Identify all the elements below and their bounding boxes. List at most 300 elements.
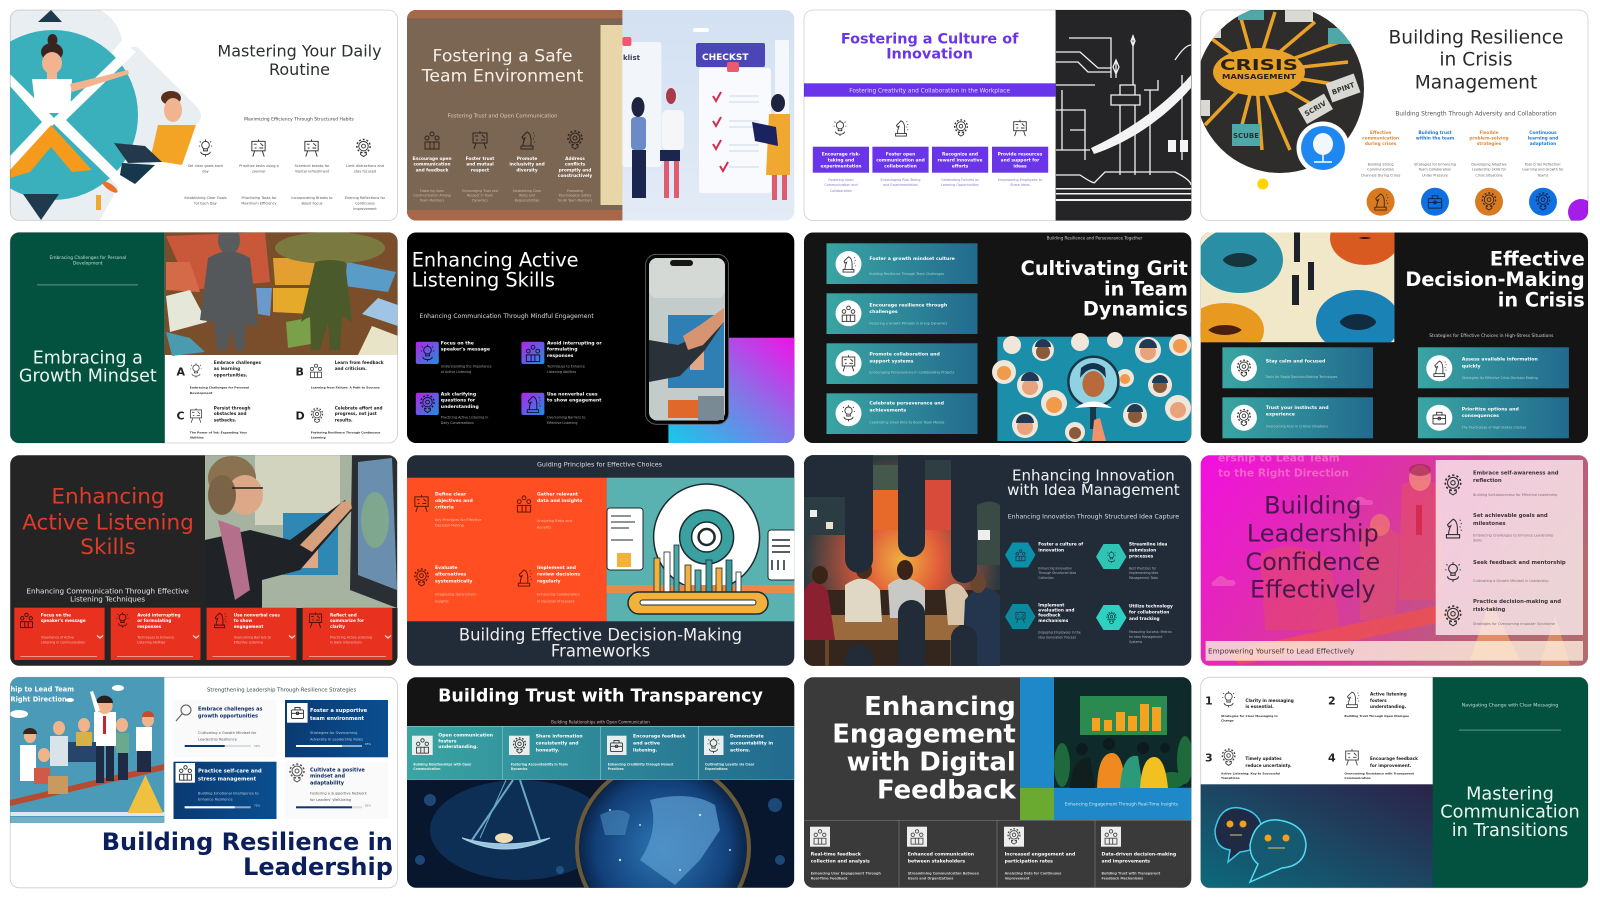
- principle headings: alternatives: [435, 572, 467, 578]
- column descriptions: Strategies for Enhancing: [1414, 162, 1456, 166]
- action descriptions: [824, 178, 1042, 192]
- band descriptions: Dynamics: [511, 767, 528, 771]
- strategy text: [214, 360, 384, 422]
- title: Building Resilience in: [102, 828, 393, 856]
- point headings: Use nonverbal cues: [547, 391, 598, 397]
- point descriptions: Overcoming Barriers to: [547, 416, 585, 420]
- point headings: and tracking: [1129, 616, 1160, 622]
- strategy descriptions: Embracing Challenges for Personal: [190, 386, 249, 390]
- column headings: [1362, 130, 1558, 147]
- action boxes: Foster open: [886, 151, 915, 157]
- title: Routine: [269, 60, 330, 79]
- illustration: team with checklist: klist: [623, 54, 641, 62]
- strategy tile: mindset: mindset and: [310, 774, 345, 780]
- point descriptions: Management Tools: [1129, 576, 1158, 580]
- subtitle band: Fostering Creativity and Collaboration in the Workplace: [849, 88, 1010, 94]
- principle headings: review decisions: [537, 572, 580, 578]
- principle labels: [412, 156, 592, 179]
- action descriptions: Celebrating Failures as: [941, 178, 979, 182]
- principle headings: objectives and: [435, 498, 473, 504]
- point descriptions: Enhancing Innovation: [1038, 566, 1072, 570]
- principle headings: criteria: [435, 505, 454, 511]
- point headings: responses: [547, 353, 574, 359]
- column headings: Effective: [1370, 130, 1391, 136]
- title: Communication: [1440, 803, 1580, 823]
- numbers: 4: [1328, 752, 1336, 765]
- photo: team meeting with rounded mask: [804, 440, 1000, 690]
- point headings: Implement: [1038, 603, 1064, 609]
- letters: [176, 366, 305, 422]
- principle labels: Address: [565, 156, 585, 162]
- habit labels: Set clear goals each: [188, 164, 223, 168]
- card descriptions: [869, 272, 955, 424]
- principle labels: Foster trust: [466, 156, 494, 162]
- numbers: 2: [1328, 694, 1336, 707]
- strategy text: Embrace challenges: [214, 360, 262, 365]
- principle labels: and mutual: [466, 162, 494, 168]
- title: Listening Skills: [412, 269, 555, 292]
- habit labels: Schedule breaks for: [295, 164, 330, 168]
- title: Enhancing Active: [412, 249, 579, 272]
- illustration: team with checklist: CHECKST: [702, 53, 749, 63]
- point headings: [1038, 542, 1173, 624]
- list panel: Embrace self-awareness and: [1473, 470, 1559, 476]
- box descriptions: Effective Listening: [234, 641, 263, 645]
- title: [422, 48, 583, 82]
- point headings: innovation: [1038, 548, 1064, 554]
- principle descriptions: in Decision Processes: [537, 599, 575, 603]
- title: Management: [1415, 72, 1537, 93]
- point descriptions: [441, 365, 585, 425]
- photo: statues on coloured cards: [165, 225, 398, 356]
- box headings: responses: [137, 624, 162, 629]
- subtitle: Enhancing Communication Through Effective: [26, 586, 189, 595]
- title: [459, 626, 742, 661]
- subtitle band: [804, 83, 1056, 97]
- band headings: and active: [633, 740, 660, 746]
- list panel: Set achievable goals and: [1473, 513, 1548, 519]
- principle descriptions: Key Principles for Effective: [435, 518, 482, 522]
- point descriptions: Implementing Idea: [1129, 571, 1158, 575]
- box headings: speaker's message: [41, 618, 86, 623]
- strategy tile: mindset: Fostering a Supportive Network: [310, 792, 368, 796]
- strategy descriptions: Development: [190, 391, 213, 395]
- strategy tile: challenges: Leadership Resilience: [198, 737, 238, 741]
- card headings: Prioritize options and: [1462, 406, 1519, 412]
- band descriptions: [413, 762, 755, 771]
- principle labels: promptly and: [559, 167, 591, 173]
- box descriptions: in Daily Interactions: [330, 641, 362, 645]
- principle labels: communication: [413, 162, 451, 168]
- column headings: strategies: [1477, 141, 1502, 147]
- card 6: Enhancing Active Listening Skills: [407, 232, 795, 443]
- strategy tile: team: Adversity in Leadership Roles: [310, 737, 363, 741]
- caption: Enhancing Engagement Through Real-Time Insights: [1065, 801, 1179, 807]
- title: Cultivating Grit: [1021, 257, 1188, 280]
- title: Enhancing: [51, 484, 165, 509]
- point headings: feedback: [1038, 613, 1061, 619]
- title: Engagement: [832, 720, 1016, 750]
- action descriptions: Collaboration: [830, 189, 852, 193]
- principle headings: regularly: [537, 578, 560, 584]
- strategy tile: self-care: 75%: [254, 804, 261, 808]
- action boxes: taking and: [828, 157, 854, 163]
- title: [832, 692, 1017, 805]
- point headings: Focus on the: [441, 340, 474, 346]
- strategy descriptions: Fostering Resilience Through Continuous: [311, 430, 381, 434]
- illustration: team climbing a slope: [10, 677, 164, 823]
- principle descriptions: [435, 518, 580, 603]
- principle labels: and feedback: [416, 167, 448, 173]
- phone with photo: [645, 254, 729, 424]
- card headings: quickly: [1462, 364, 1481, 370]
- illustration: audience watching bar chart: [1054, 677, 1193, 788]
- column headings: during crises: [1365, 141, 1397, 147]
- card headings: challenges: [869, 309, 898, 315]
- principle headings: Gather relevant: [537, 491, 579, 497]
- principle descriptions: Dynamics: [472, 199, 488, 203]
- title: [1440, 784, 1580, 841]
- point descriptions: Transitions: [1221, 776, 1240, 780]
- point headings: mechanisms: [1038, 618, 1069, 624]
- column descriptions: [811, 871, 1161, 880]
- title: Effective: [1490, 248, 1585, 271]
- point headings: fosters: [1370, 698, 1387, 703]
- action descriptions: and Experimentation: [883, 183, 918, 187]
- band headings: Open communication: [438, 733, 493, 739]
- title: [22, 484, 194, 560]
- title: [1405, 248, 1585, 312]
- habit descriptions: for Each Day: [194, 202, 217, 206]
- title: [1389, 27, 1563, 93]
- habit descriptions: Boost Focus: [302, 202, 323, 206]
- column descriptions: Feedback Mechanisms: [1102, 876, 1143, 880]
- point descriptions: Measuring Success: Metrics: [1129, 630, 1172, 634]
- title: in Transitions: [1452, 821, 1568, 841]
- band headings: fosters: [438, 738, 457, 744]
- title: Decision-Making: [1405, 268, 1585, 291]
- card 16: Mastering Communication in Transitions: [1200, 677, 1589, 888]
- band headings: honestly.: [536, 747, 560, 753]
- title: with Digital: [847, 748, 1016, 778]
- habit labels: mental refreshment: [295, 170, 330, 174]
- box headings: clarity: [330, 624, 345, 629]
- column descriptions: Building Trust with Transparent: [1102, 871, 1161, 875]
- column headings: Data-driven decision-making: [1102, 852, 1176, 858]
- band descriptions: Building Relationships with Open: [413, 762, 471, 766]
- principle labels: Promote: [517, 156, 537, 162]
- strategy text: as learning: [214, 366, 240, 371]
- strategy tile: challenges: Embrace challenges as: [198, 707, 262, 713]
- box descriptions: Listening in Communication: [41, 641, 85, 645]
- point headings: to show engagement: [547, 398, 602, 404]
- column headings: Continuous: [1529, 130, 1557, 136]
- point descriptions: of Active Listening: [441, 370, 471, 374]
- strategy tile: challenges: growth opportunities: [198, 714, 258, 720]
- photo: crisis management wheel: CRISIS: [1220, 56, 1298, 74]
- box headings: Focus on the: [41, 612, 71, 617]
- column headings: between stakeholders: [908, 859, 965, 865]
- photo: crisis management wheel: MANSAGEMENT: [1222, 73, 1296, 81]
- principle descriptions: Enhancing Collaboration: [537, 592, 580, 596]
- title: Growth Mindset: [19, 367, 157, 387]
- habit descriptions: Incorporating Breaks to: [291, 196, 333, 200]
- principle descriptions: Responsibilities: [515, 199, 540, 203]
- hexagon icons: [1005, 542, 1126, 630]
- numbers: 1: [1205, 694, 1213, 707]
- tagline bar: [1206, 641, 1583, 661]
- top text: [50, 256, 126, 266]
- title: in Team: [1104, 278, 1188, 301]
- point descriptions: for Idea Management: [1129, 635, 1163, 639]
- list panel: Practice decision-making and: [1473, 599, 1561, 605]
- icon row: [199, 139, 370, 157]
- principle headings: Implement and: [537, 565, 576, 571]
- point headings: [441, 340, 602, 410]
- point descriptions: Active Listening: Key to Successful: [1221, 772, 1280, 776]
- point descriptions: Communication: [1344, 776, 1371, 780]
- column descriptions: Communication: [1367, 168, 1394, 172]
- illustration: target and bar chart: [607, 478, 796, 621]
- habit descriptions: Prioritizing Tasks for: [241, 196, 277, 200]
- band headings: understanding.: [438, 744, 478, 750]
- title: [102, 828, 393, 881]
- point descriptions: Idea Generation Process: [1038, 635, 1076, 639]
- column descriptions: Users and Organizations: [908, 876, 953, 880]
- icon row: [425, 131, 582, 149]
- strategy descriptions: [190, 386, 381, 439]
- band headings: accountability in: [730, 740, 773, 746]
- band descriptions: Communication: [413, 767, 440, 771]
- box descriptions: Listening Abilities: [137, 641, 166, 645]
- strategy text: Persist through: [214, 405, 251, 410]
- point descriptions: Daily Conversations: [441, 421, 474, 425]
- point headings: reduce uncertainty.: [1245, 763, 1292, 768]
- card headings: Encourage resilience through: [869, 302, 947, 308]
- title: [20, 350, 156, 382]
- band headings: listening.: [633, 747, 658, 753]
- action descriptions: Empowering Employees to: [998, 178, 1042, 182]
- column descriptions: Developing Adaptive: [1471, 162, 1507, 166]
- icon tiles: [416, 342, 544, 415]
- chevrons and rules: [20, 636, 391, 656]
- column descriptions: Under Pressure: [1422, 174, 1448, 178]
- principle descriptions: for All Team Members: [558, 199, 593, 203]
- title: [1021, 257, 1188, 321]
- card headings: experience: [1266, 412, 1295, 418]
- column descriptions: Building Strong: [1368, 162, 1394, 166]
- list panel: reflection: [1473, 478, 1502, 484]
- principle descriptions: Insights: [435, 599, 449, 603]
- strategy tile: mindset: [285, 762, 388, 819]
- band descriptions: Expectations: [705, 767, 728, 771]
- strategy tile: team: 65%: [365, 742, 372, 746]
- column headings: Flexible: [1479, 130, 1499, 136]
- column descriptions: Crisis Situations: [1475, 174, 1503, 178]
- title: Embracing a: [33, 348, 143, 368]
- action boxes: Provide resources: [998, 151, 1043, 157]
- card 14: Building Trust with Transparency: [407, 677, 795, 900]
- icons: [415, 495, 532, 586]
- card 13: Building Resilience in Leadership: [10, 677, 398, 888]
- point descriptions: Practicing Active Listening in: [441, 416, 488, 420]
- top text: Development: [73, 260, 103, 266]
- principle descriptions: [413, 189, 593, 203]
- card descriptions: Fostering a Growth Mindset in Group Dynamics: [869, 321, 947, 325]
- ghost text: [1218, 452, 1349, 480]
- strategy tile: self-care: Enhance Resilience: [198, 798, 234, 802]
- icon: globe badge: [1296, 122, 1348, 170]
- habit descriptions: Maximum Efficiency: [241, 202, 277, 206]
- card headings: Celebrate perseverance and: [869, 401, 944, 407]
- point descriptions: Through Structured Idea: [1037, 571, 1076, 575]
- list panel: milestones: [1473, 521, 1506, 527]
- strategy tile: mindset: 85%: [365, 804, 372, 808]
- subtitle: Fostering Trust and Open Communication: [448, 113, 558, 119]
- subtitle: Enhancing Communication Through Mindful Engagement: [419, 313, 594, 320]
- letters: B: [296, 366, 304, 379]
- strategy text: progress, not just: [335, 411, 377, 416]
- point descriptions: Change: [1221, 719, 1234, 723]
- card 15: Enhancing Engagement with Digital Feedback: [804, 677, 1193, 888]
- icons: [190, 363, 323, 423]
- card 8: Effective Decision-Making in Crisis: [1197, 224, 1590, 444]
- box descriptions: Practicing Active Listening: [330, 635, 372, 639]
- card descriptions: The Psychology of High-Stakes Choices: [1461, 425, 1527, 429]
- icon badges: [1231, 355, 1452, 431]
- action boxes: [813, 147, 1048, 173]
- point descriptions: Understanding the Importance: [441, 365, 492, 369]
- column descriptions: Post-Crisis Reflection:: [1525, 162, 1561, 166]
- point descriptions: Listening Abilities: [547, 370, 576, 374]
- strategy tile: mindset: adaptability: [310, 781, 345, 787]
- habit descriptions: [184, 196, 386, 211]
- point headings: Encourage feedback: [1370, 756, 1418, 761]
- card descriptions: Building Resilience Through Team Challenges: [869, 272, 944, 276]
- box headings: summarize for: [330, 618, 365, 623]
- title: Fostering a Safe: [432, 47, 572, 67]
- teal cards: [1222, 347, 1569, 438]
- decorative corner: [1568, 199, 1588, 220]
- ghost text: to the Right Direction: [1218, 467, 1349, 480]
- strategy text: Learn from feedback: [335, 360, 384, 365]
- illustration: chat bubbles with robot faces: [1200, 784, 1433, 888]
- principle descriptions: Communication Among: [413, 194, 451, 198]
- list panel: Strategies for Overcoming Imposter Syndrome: [1473, 622, 1555, 626]
- action boxes: and support for: [1001, 157, 1040, 163]
- numbers: [1205, 694, 1336, 765]
- card 2: Fostering a Safe Team Environment: [407, 10, 794, 221]
- habit descriptions: Improvement: [353, 207, 377, 211]
- strategy text: and criticism.: [335, 366, 367, 371]
- principle headings: data and insights: [537, 498, 582, 504]
- list panel: Building Self-Awareness for Effective Leadership: [1473, 493, 1558, 497]
- habit descriptions: Evening Reflections for: [345, 196, 386, 200]
- list panel: risk-taking: [1473, 607, 1506, 613]
- title: Active Listening: [22, 510, 194, 535]
- column descriptions: Improvement: [1005, 876, 1030, 880]
- title: Building Trust with Transparency: [438, 687, 764, 707]
- top text: Navigating Change with Clear Messaging: [1462, 703, 1558, 709]
- title: Effectively: [1250, 576, 1376, 604]
- column headings: Enhanced communication: [908, 852, 974, 858]
- icon badges: [836, 251, 862, 426]
- band headings: actions.: [730, 747, 751, 753]
- habit labels: stay focused: [354, 170, 376, 174]
- column headings: learning and: [1528, 135, 1558, 141]
- point headings: speaker's message: [441, 347, 490, 353]
- teal cards: [826, 243, 978, 434]
- icons: [1222, 691, 1359, 765]
- habit labels: [188, 164, 384, 173]
- card 4: Building Resilience in Crisis Management: [1196, 5, 1594, 225]
- habit labels: Prioritize tasks using a: [239, 164, 279, 168]
- band descriptions: Enhancing Credibility through Honest: [608, 762, 674, 766]
- point descriptions: Techniques to Enhance: [546, 365, 585, 369]
- title: Feedback: [877, 775, 1017, 805]
- principle descriptions: Roles and: [519, 194, 535, 198]
- card headings: Assess available information: [1462, 357, 1538, 363]
- card descriptions: Celebrating Small Wins to Boost Team Morale: [869, 420, 944, 424]
- column headings: within the team: [1416, 135, 1455, 141]
- point headings: evaluation and: [1038, 608, 1074, 614]
- photo: crisis management wheel: BPINT: [1331, 81, 1356, 97]
- column descriptions: Team Collaboration: [1418, 168, 1451, 172]
- point headings: Utilize technology: [1129, 603, 1173, 609]
- numbers: 3: [1205, 752, 1213, 765]
- photo: crisis management wheel: SCUBE: [1233, 132, 1259, 140]
- box headings: Reflect and: [330, 612, 357, 617]
- card headings: support systems: [869, 358, 914, 364]
- title: Frameworks: [551, 642, 650, 661]
- strategy descriptions: Abilities: [190, 435, 204, 439]
- card 1: Mastering Your Daily Routine: [0, 10, 398, 221]
- subtitle: Listening Techniques: [70, 595, 145, 604]
- strategy descriptions: Learning: [311, 435, 326, 439]
- box descriptions: Techniques to Enhance: [136, 635, 174, 639]
- column headings: adaptation: [1530, 141, 1556, 147]
- card headings: achievements: [869, 407, 906, 413]
- photo: woman at touch screen: [205, 455, 398, 608]
- point headings: questions for: [441, 398, 476, 404]
- column descriptions: Learning and Growth for: [1522, 168, 1564, 172]
- teal band: [407, 726, 795, 780]
- principle headings: systematically: [435, 578, 472, 584]
- subtitle: [26, 586, 189, 604]
- principle labels: respect: [471, 167, 489, 173]
- subtitle: Building Strength Through Adversity and Collaboration: [1395, 112, 1557, 118]
- habit descriptions: Establishing Clear Goals: [184, 196, 227, 200]
- title: [412, 249, 579, 292]
- title: in Crisis: [1439, 50, 1513, 71]
- illustration: team climbing a slope: hip to Lead Team: [10, 686, 74, 694]
- title: [218, 44, 382, 75]
- action boxes: efforts: [952, 164, 969, 170]
- principle labels: inclusivity and: [509, 162, 545, 168]
- strategy tile: team: Strategies for Overcoming: [310, 731, 357, 735]
- illustration: climbing team overlay: [1211, 464, 1570, 665]
- photo: crisis management wheel: [1196, 5, 1366, 175]
- strategy tile: mindset: Cultivate a positive: [310, 767, 365, 773]
- box headings: engagement: [234, 624, 263, 629]
- card 11: Enhancing Innovation with Idea Management: [804, 440, 1192, 690]
- box headings: Use nonverbal cues: [234, 612, 280, 617]
- illustration: team climbing a slope: Right Direction: [10, 696, 67, 704]
- point headings: Timely updates: [1245, 756, 1282, 761]
- point headings: [1245, 692, 1418, 768]
- strategy tile: mindset: for Leaders' Well-being: [310, 798, 351, 802]
- letters: D: [296, 409, 305, 422]
